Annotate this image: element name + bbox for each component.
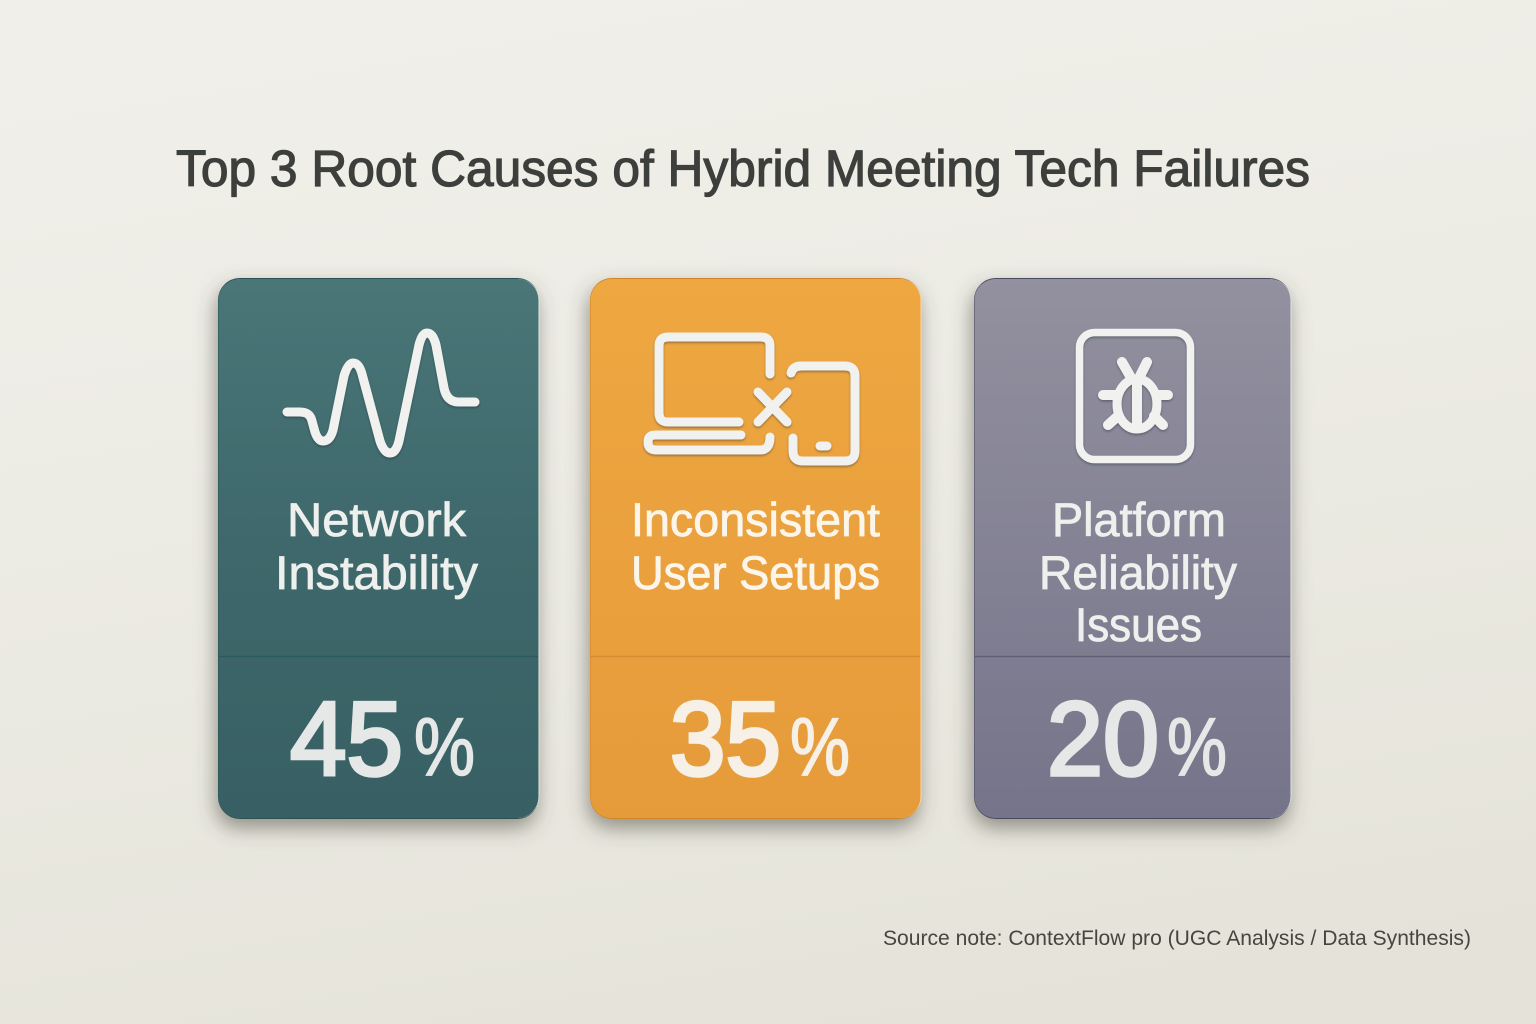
label: inconsistent user setups (631, 493, 880, 599)
source note: Source note: ContextFlow pro (UGC Analysis / Data Synthesis) (883, 927, 1471, 950)
label: platform reliability issues (1039, 493, 1237, 651)
label: network instability: Instability (275, 546, 479, 599)
value: 20%: 20 (1047, 681, 1159, 798)
panel: network instability (218, 278, 540, 819)
label: platform reliability issues: Issues (1075, 598, 1202, 651)
label: platform reliability issues: Platform (1052, 493, 1226, 546)
panel: platform reliability issues (974, 278, 1292, 819)
value: 35%: % (790, 702, 850, 793)
value: 45%: % (414, 702, 475, 793)
value: 45% (290, 681, 475, 798)
value: 20%: % (1167, 702, 1227, 793)
title: Top 3 Root Causes of Hybrid Meeting Tech Failures (176, 140, 1310, 197)
icon: network wave (287, 333, 475, 453)
value: 35% (670, 681, 850, 798)
card background (590, 279, 920, 818)
icon: laptop, tablet and cross (648, 337, 855, 461)
label: platform reliability issues: Reliability (1039, 546, 1237, 599)
value: 20% (1047, 681, 1227, 798)
label: inconsistent user setups: User Setups (631, 546, 880, 599)
label: network instability: Network (287, 493, 467, 546)
label: network instability (275, 493, 479, 599)
label: inconsistent user setups: Inconsistent (631, 493, 880, 546)
panel: inconsistent user setups (590, 278, 922, 819)
value: 45%: 45 (290, 681, 403, 798)
icon: bug in window (1080, 332, 1190, 460)
card background (974, 279, 1290, 818)
value: 35%: 35 (670, 681, 781, 798)
card background (218, 279, 538, 818)
